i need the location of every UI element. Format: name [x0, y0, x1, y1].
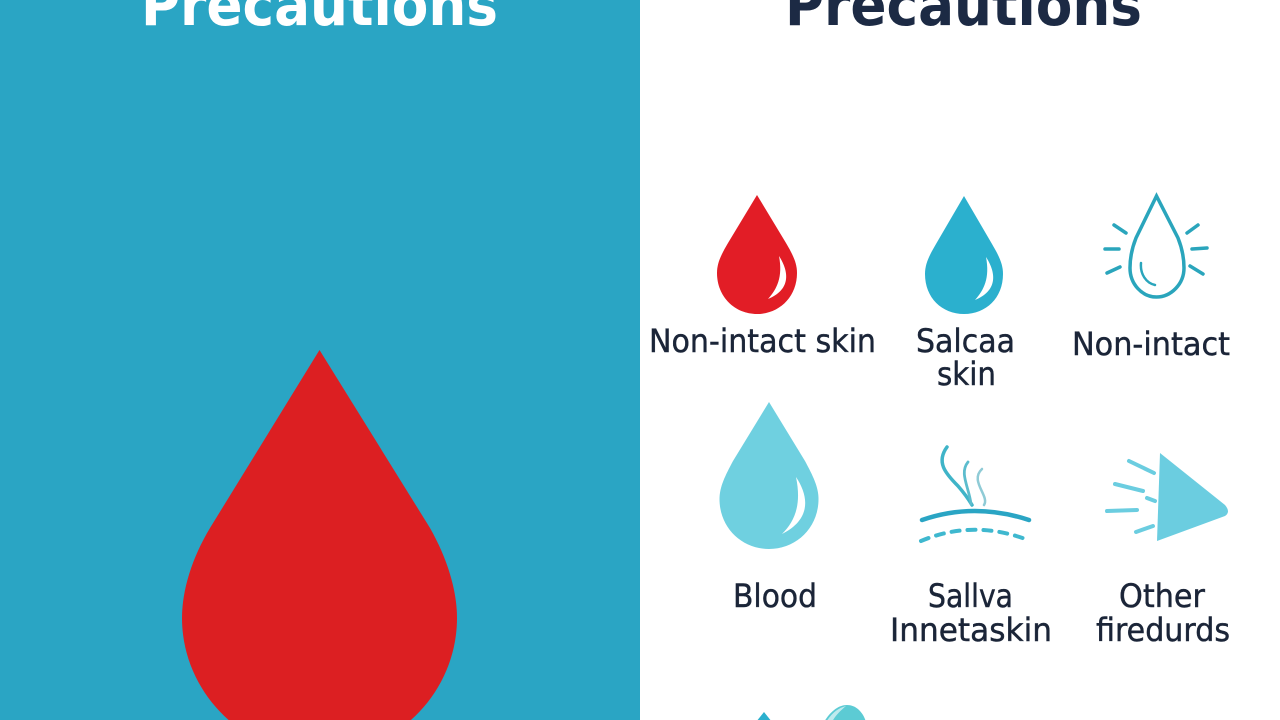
icon: triangle with motion lines [1107, 453, 1228, 541]
label: Salcaa skin [916, 322, 1015, 393]
label: Other firedurds [1096, 577, 1230, 649]
label: Blood: Blood [733, 577, 817, 615]
label: Salcaa skin: skin [937, 355, 996, 393]
panel: right white background [640, 0, 1280, 720]
label: Sallva Innetaskin: Innetaskin [890, 611, 1052, 649]
icon: skin with rising wisps [921, 447, 1029, 541]
icon: outlined drop with rays [1105, 196, 1207, 297]
label: Other firedurds: firedurds [1096, 611, 1230, 649]
icon: cropped teal shape at bottom [824, 705, 866, 720]
label: Sallva Innetaskin: Sallva [928, 577, 1013, 615]
label: Non-intact: Non-intact [1072, 325, 1230, 363]
label: Salcaa skin: Salcaa [916, 322, 1015, 360]
label: Other firedurds: Other [1119, 577, 1206, 615]
icon: cropped small drop at bottom [756, 712, 772, 720]
icon: light blue blood drop [720, 402, 818, 549]
label: Non-intact skin: Non-intact skin [649, 322, 876, 360]
icon: large red blood drop [182, 350, 457, 720]
label: Sallva Innetaskin [890, 577, 1052, 649]
icon: red drop [717, 195, 797, 314]
panel: left teal background [0, 0, 640, 720]
icon: blue drop [925, 196, 1003, 314]
